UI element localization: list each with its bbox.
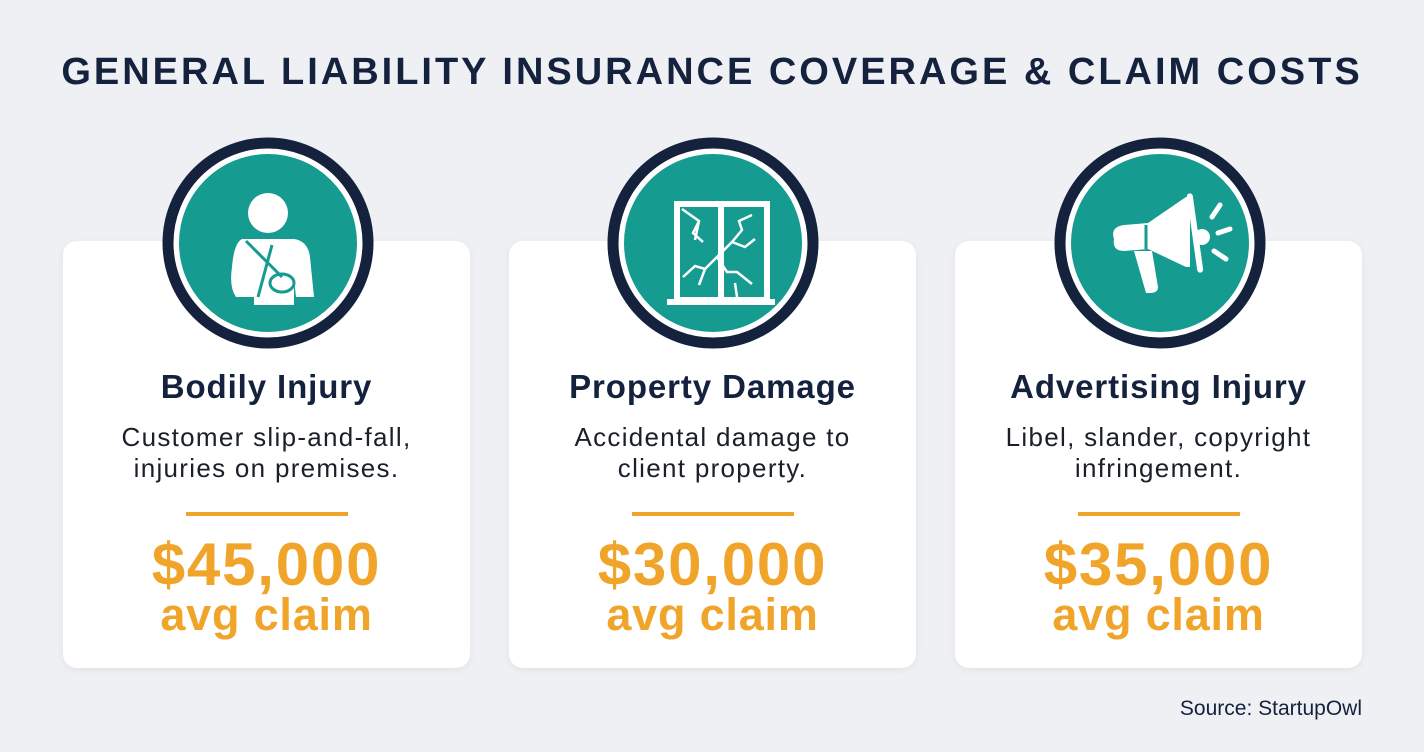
panel: advertising injury bbox=[955, 241, 1362, 668]
panel: bodily injury bbox=[63, 241, 470, 668]
description: Accidental damage to bbox=[574, 422, 851, 452]
divider accent bbox=[632, 512, 794, 516]
heading: property damage: Property Damage bbox=[569, 368, 856, 405]
label: avg claim bbox=[1052, 589, 1265, 640]
description: infringement. bbox=[1075, 453, 1242, 483]
value: $35,000 bbox=[1044, 531, 1273, 598]
description: client property. bbox=[618, 453, 807, 483]
description: Customer slip-and-fall, bbox=[122, 422, 412, 452]
description bbox=[574, 422, 851, 483]
source note: Source: StartupOwl bbox=[1180, 697, 1362, 720]
divider accent bbox=[186, 512, 348, 516]
panel: property damage bbox=[509, 241, 916, 668]
heading: advertising injury: Advertising Injury bbox=[1010, 368, 1307, 405]
heading: bodily injury: Bodily Injury bbox=[161, 368, 372, 405]
description: injuries on premises. bbox=[134, 453, 399, 483]
value: $30,000 bbox=[598, 531, 827, 598]
label: avg claim bbox=[160, 589, 373, 640]
icon: broken window bbox=[608, 138, 818, 348]
value: $45,000 bbox=[152, 531, 381, 598]
icon: megaphone bbox=[1054, 138, 1266, 348]
divider accent bbox=[1078, 512, 1240, 516]
description bbox=[1006, 422, 1311, 483]
title: GENERAL LIABILITY INSURANCE COVERAGE & CLAIM COSTS bbox=[61, 51, 1363, 93]
icon: injured person with sling bbox=[162, 138, 374, 348]
label: avg claim bbox=[606, 589, 819, 640]
description bbox=[122, 422, 412, 483]
description: Libel, slander, copyright bbox=[1006, 422, 1311, 452]
